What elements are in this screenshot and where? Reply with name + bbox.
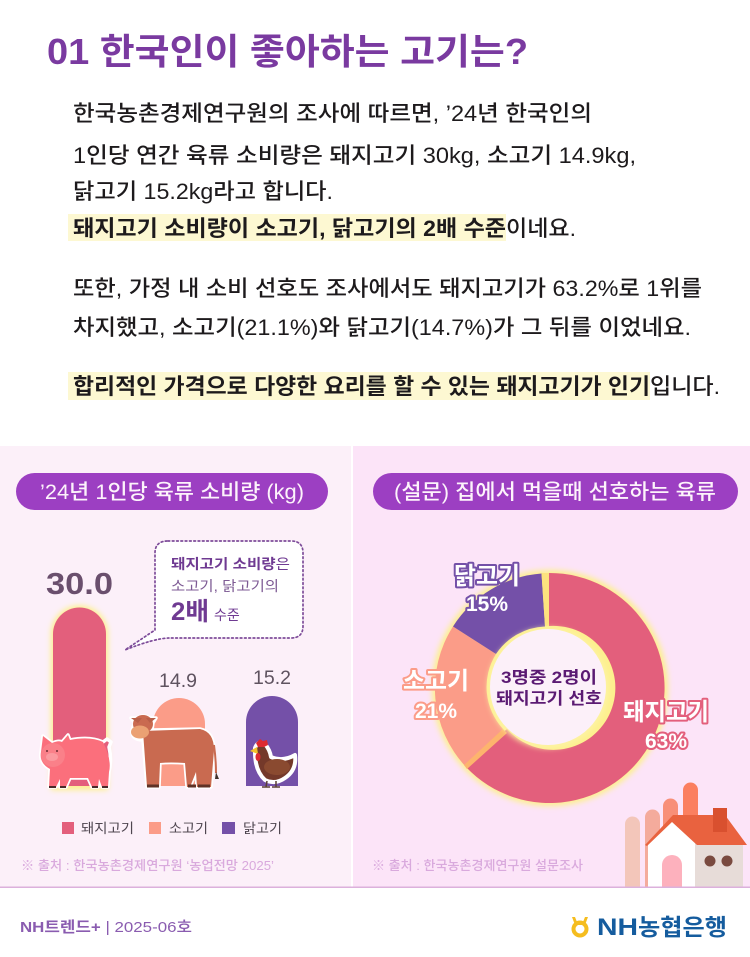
bar: pork: 30.0 [46,566,113,601]
callout: twice the level [125,541,303,650]
slice: chicken 15% [453,574,545,654]
text block: consumption intro [73,101,636,204]
callout: twice the level: 수준 [214,607,240,623]
donut center note [488,628,608,748]
footer: publication info: NH트렌드+ | 2025-06호 [20,919,192,936]
panel: per capita meat consumption [0,446,351,887]
legend: consumption: 돼지고기 [81,821,134,836]
data label: chicken 15%: 15% [466,593,508,616]
text block: consumption intro: 닭고기 15.2kg라고 합니다. [73,179,333,204]
text block: preference survey: 또한, 가정 내 소비 선호도 조사에서도 돼지고기가 63.2%로 1위를 [73,276,702,301]
legend: consumption: 소고기 [169,821,208,836]
donut chart: preference [432,570,668,806]
data label: pork 63% [623,699,709,753]
callout: twice the level: 소고기, 닭고기의 [171,578,279,594]
data label: beef 21% [403,668,469,723]
highlighted sentence: double consumption: 돼지고기 소비량이 소고기, 닭고기의 2배 수준 [73,216,506,241]
highlighted sentence: reasonable price: 입니다. [650,374,720,399]
bar: chicken: 15.2 [253,668,291,689]
heading pill: survey [373,473,738,510]
logo: NH bank [572,914,727,941]
donut center note: 돼지고기 선호 [496,689,602,708]
legend: consumption [62,821,282,836]
text block: consumption intro: 1인당 연간 육류 소비량은 돼지고기 30kg, 소고기 14.9kg, [73,143,636,168]
bar: beef [153,671,205,786]
highlighted sentence: double consumption: 이네요. [506,216,576,241]
heading pill: consumption: ’24년 1인당 육류 소비량 (kg) [40,481,304,504]
text block: preference survey: 차지했고, 소고기(21.1%)와 닭고기(14.7%)가 그 뒤를 이었네요. [73,315,691,340]
source note: consumption: ※ 출처 : 한국농촌경제연구원 ‘농업전망 2025’ [21,858,274,873]
icon: cow [131,715,219,787]
data label: chicken 15% [454,563,520,616]
icon: house with chart bars [625,782,747,887]
heading pill: consumption [16,473,328,510]
highlighted sentence: reasonable price: 합리적인 가격으로 다양한 요리를 할 수 있는 돼지고기가 인기 [73,374,650,399]
slice: pork 63% [466,573,665,803]
icon: pig [41,735,111,787]
legend: consumption: 닭고기 [243,821,282,836]
icon: hen [250,739,295,787]
callout: twice the level: 돼지고기 소비량 은 [171,556,290,572]
bar chart: consumption [46,566,298,790]
donut center note: 3명중 2명이 [501,668,597,687]
data label: beef 21%: 소고기 [403,668,469,695]
source note: survey: ※ 출처 : 한국농촌경제연구원 설문조사 [372,858,583,873]
data label: beef 21%: 21% [415,700,457,723]
heading pill: survey: (설문) 집에서 먹을때 선호하는 육류 [394,481,716,504]
bar: chicken [246,668,298,786]
panel: preferred meat survey [353,446,750,887]
bar: pork [46,566,113,790]
logo: NH bank: 농협은행 [638,914,727,940]
callout: twice the level: 2배 [171,598,209,626]
bar: beef: 14.9 [159,671,197,692]
data label: chicken 15%: 닭고기 [454,563,520,590]
text block: consumption intro: 한국농촌경제연구원의 조사에 따르면, ’24년 한국인의 [73,101,592,126]
data label: pork 63%: 돼지고기 [623,699,709,726]
logo: NH bank: NH [597,914,638,941]
data label: pork 63%: 63% [645,730,687,753]
text block: preference survey [73,276,702,340]
slice: beef 21% [435,626,503,767]
title: 01 한국인이 좋아하는 고기는? [47,31,528,72]
